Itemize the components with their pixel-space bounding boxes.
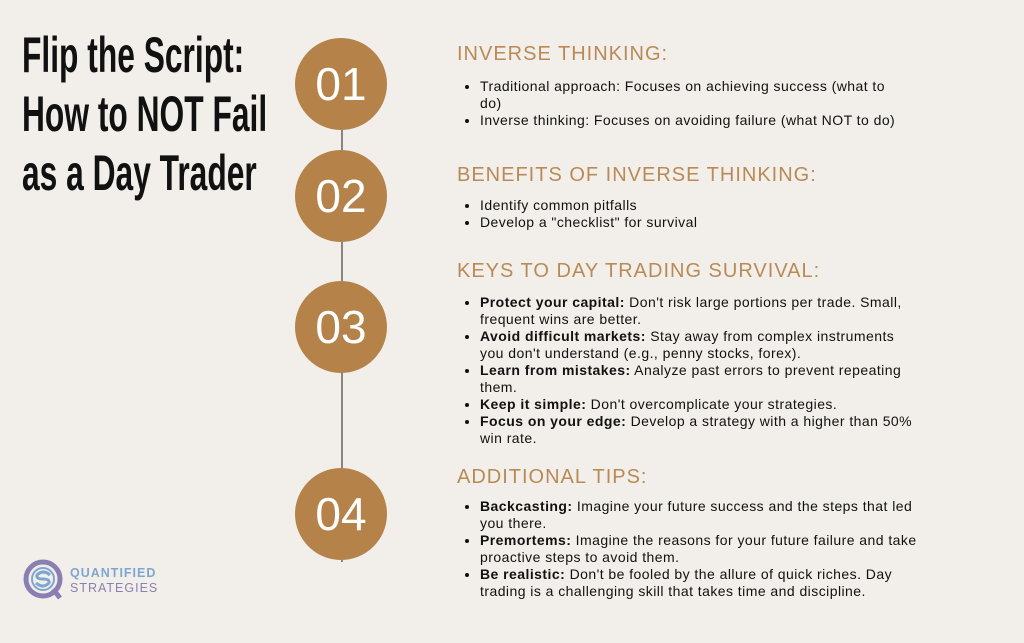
list 4: Premortems: Imagine the reasons for your future failure and take proactive steps to avoid them. <box>480 532 917 565</box>
logo <box>24 560 158 600</box>
list 3: Protect your capital: Don't risk large portions per trade. Small, frequent wins are better. <box>480 294 902 327</box>
list 1: Inverse thinking: Focuses on avoiding failure (what NOT to do) <box>480 112 895 128</box>
list 1: Traditional approach: Focuses on achieving success (what to do) <box>480 78 885 111</box>
heading 2: BENEFITS OF INVERSE THINKING: <box>457 164 817 186</box>
logo: STRATEGIES <box>70 581 158 595</box>
circle 01 <box>295 38 387 130</box>
title: Flip the Script: <box>22 27 244 83</box>
list 4: Backcasting: Imagine your future success and the steps that led you there. <box>480 498 912 531</box>
circle 04 <box>295 468 387 560</box>
title <box>22 27 267 201</box>
list 3 <box>465 294 912 446</box>
list 1 <box>465 78 895 128</box>
logo: QUANTIFIED <box>70 566 156 580</box>
heading 4: ADDITIONAL TIPS: <box>457 466 647 488</box>
timeline line <box>341 84 343 562</box>
title: as a Day Trader <box>22 145 257 201</box>
circle 01: 01 <box>315 58 367 110</box>
list 4: Be realistic: Don't be fooled by the allure of quick riches. Day trading is a challenging skill that takes time and discipline. <box>480 566 892 599</box>
list 4 <box>465 498 917 599</box>
circle 02 <box>295 150 387 242</box>
list 3: Focus on your edge: Develop a strategy with a higher than 50% win rate. <box>480 413 912 446</box>
heading 3: KEYS TO DAY TRADING SURVIVAL: <box>457 260 820 282</box>
circle 02: 02 <box>315 170 367 222</box>
list 2: Identify common pitfalls <box>480 197 637 213</box>
list 3: Avoid difficult markets: Stay away from complex instruments you don't understand (e.g., penny stocks, forex). <box>480 328 894 361</box>
circle 04: 04 <box>315 488 367 540</box>
circle 03: 03 <box>315 301 367 353</box>
list 3: Keep it simple: Don't overcomplicate your strategies. <box>480 396 837 412</box>
heading 1: INVERSE THINKING: <box>457 43 668 65</box>
title: How to NOT Fail <box>22 86 267 142</box>
list 3: Learn from mistakes: Analyze past errors to prevent repeating them. <box>480 362 901 395</box>
list 2: Develop a "checklist" for survival <box>480 214 697 230</box>
circle 03 <box>295 281 387 373</box>
list 2 <box>465 197 697 230</box>
